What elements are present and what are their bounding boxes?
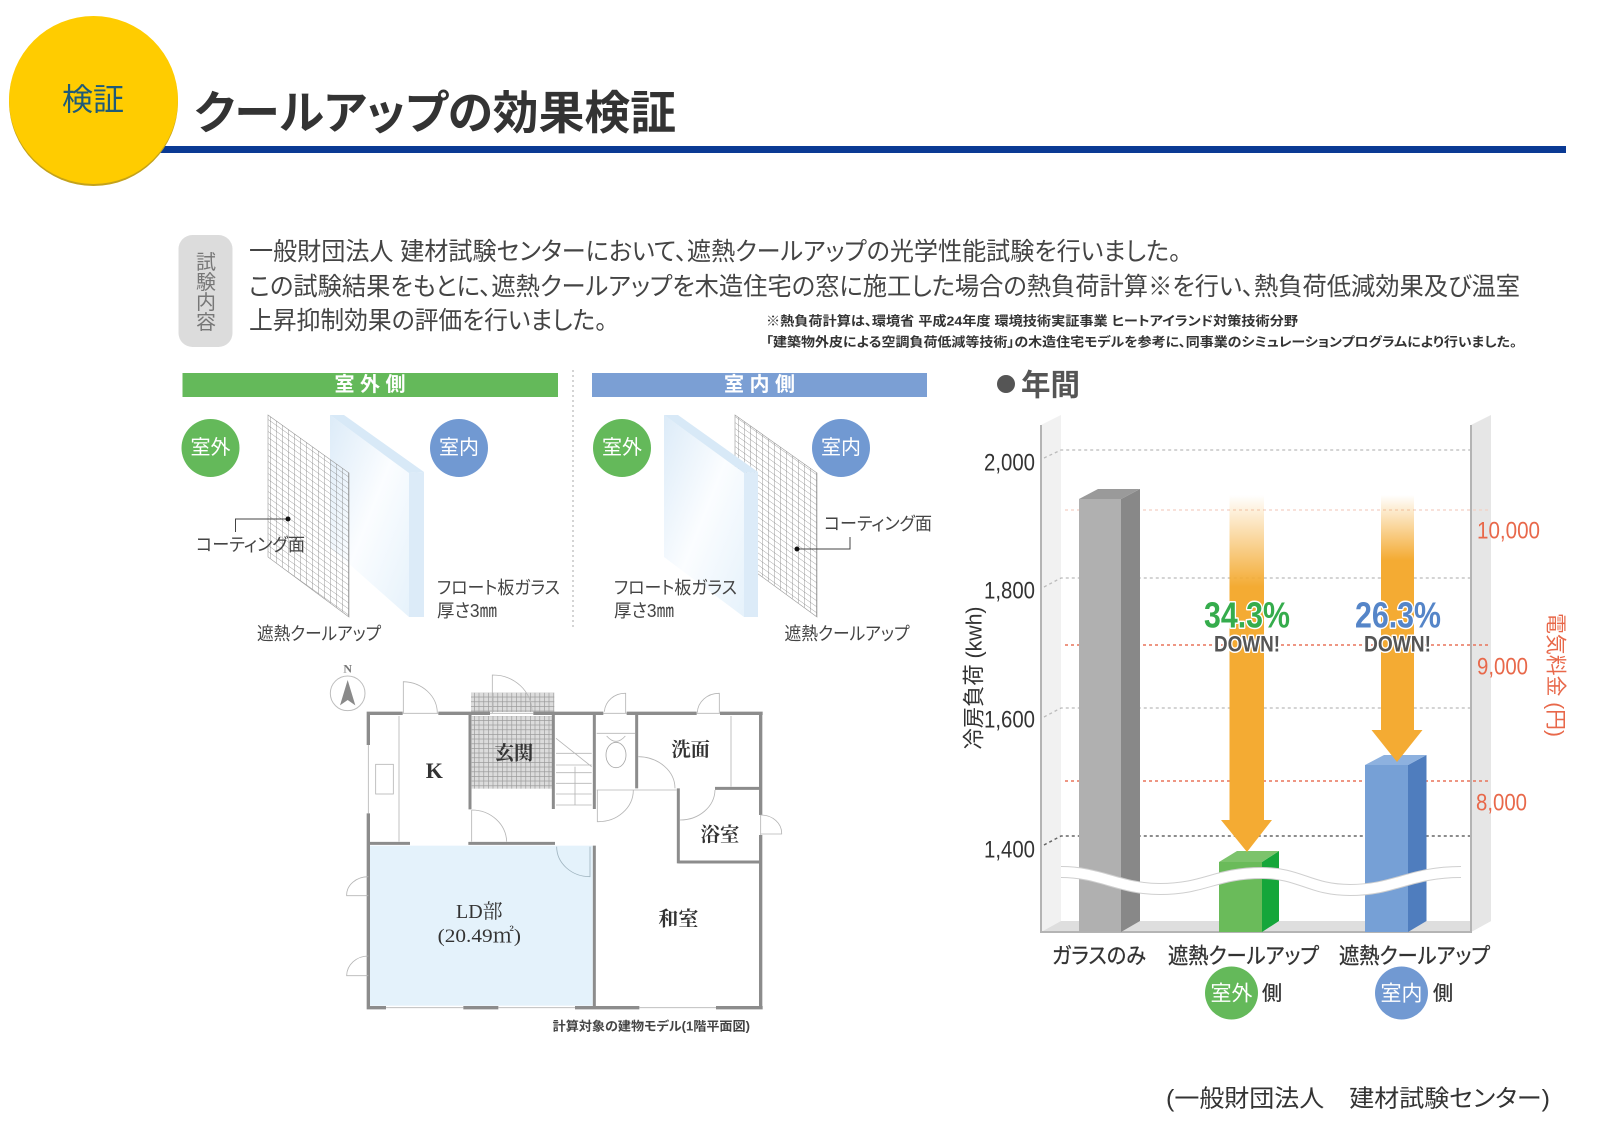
label pill: 試験内容 (178, 235, 232, 347)
glass label: フロート板ガラス (437, 578, 560, 598)
right axis labels: 10,000 (1477, 518, 1540, 544)
badge: 室外 (182, 419, 240, 477)
label pill: 試験内容: 容 (196, 311, 216, 334)
header bar: 室外側: 室 外 側 (334, 373, 406, 396)
callout: 26.3% down (1355, 594, 1441, 656)
label pill: 試験内容: 試 (196, 251, 216, 274)
description text: この試験結果をもとに、遮熱クールアップを木造住宅の窓に施工した場合の熱負荷計算※を行い、熱負荷低減効果及び温室 (249, 273, 1520, 301)
glass pane (330, 415, 424, 617)
plan caption: 計算対象の建物モデル(1階平面図) (553, 1019, 750, 1034)
badge: 検証 (9, 16, 178, 186)
description text (249, 238, 1520, 335)
footnote: 「建築物外皮による空調負荷低減等技術」の木造住宅モデルを参考に、同事業のシミュレーションプログラムにより行いました。 (766, 334, 1517, 350)
label pill: 試験内容: 内 (196, 291, 216, 314)
room labels: K (426, 758, 443, 783)
footnote: ※熱負荷計算は、環境省 平成24年度 環境技術実証事業 ヒートアイランド対策技術分野 (766, 314, 1298, 328)
bar: glass only (1079, 489, 1140, 932)
callout: 34.3% down (1204, 594, 1290, 656)
chart frame (1041, 415, 1491, 932)
header bar: 室内側: 室 内 側 (724, 373, 795, 396)
room fill: LD (370, 846, 593, 1006)
room labels: 洗面 (671, 739, 710, 761)
description text: 一般財団法人 建材試験センターにおいて、遮熱クールアップの光学性能試験を行いました。 (249, 238, 1181, 266)
left axis labels: 1,800 (984, 578, 1035, 604)
header bar: 室内側 (592, 373, 927, 397)
right axis labels: 9,000 (1477, 654, 1528, 680)
footnote (766, 314, 1517, 350)
badge: 室外: 室外 (190, 436, 230, 459)
film label: 遮熱クールアップ (257, 624, 381, 644)
coating label and leader (794, 514, 932, 552)
room labels (426, 739, 739, 947)
category label: outdoor side: 側 (1262, 982, 1282, 1005)
panel: indoor-side application (592, 373, 932, 644)
compass: N (343, 661, 352, 675)
left axis labels: 1,600 (984, 706, 1035, 734)
glass label (614, 578, 737, 621)
category label: outdoor side: 遮熱クールアップ (1168, 944, 1319, 968)
category label: indoor side: 遮熱クールアップ (1339, 944, 1490, 968)
callout: 26.3% down: DOWN! (1364, 632, 1431, 656)
badge: 室外: 室外 (602, 436, 642, 459)
floor plan (330, 661, 782, 1034)
callout: 34.3% down: DOWN! (1214, 632, 1280, 656)
header bar: 室外側 (182, 373, 558, 397)
glass label: 厚さ3㎜ (437, 601, 497, 621)
bar: indoor side (1365, 755, 1426, 932)
category label: indoor side: 室内 (1380, 982, 1422, 1006)
badge: 室外 (593, 419, 651, 477)
compass (330, 661, 365, 711)
category label: indoor side: 側 (1433, 982, 1453, 1005)
badge: 検証: 検証 (62, 82, 124, 118)
label pill: 試験内容: 験 (196, 271, 216, 294)
walls (367, 713, 763, 1009)
left axis labels: 2,000 (984, 450, 1035, 476)
right axis labels (1476, 518, 1540, 816)
panel: outdoor-side application (182, 373, 560, 644)
glass label: フロート板ガラス (614, 578, 737, 598)
room labels: 玄関 (495, 742, 533, 764)
callout: 26.3% down: 26.3% (1355, 594, 1441, 636)
left axis labels (984, 450, 1035, 864)
arrow: indoor reduction (1372, 495, 1422, 762)
badge: 室内: 室内 (821, 436, 861, 459)
chart: annual cooling load (962, 370, 1566, 1020)
left axis labels: 1,400 (984, 836, 1035, 864)
callout: 34.3% down: 34.3% (1204, 594, 1290, 636)
category label: indoor side (1339, 944, 1490, 1020)
title: クールアップの効果検証 (194, 87, 676, 139)
entrance tile (471, 693, 554, 789)
glass label: 厚さ3㎜ (614, 601, 674, 621)
description text: 上昇抑制効果の評価を行いました。 (249, 307, 607, 335)
right axis labels: 8,000 (1476, 790, 1527, 816)
room labels: 浴室 (701, 823, 739, 846)
doors (347, 675, 782, 976)
header rule (160, 146, 1566, 153)
room labels: LD部 (456, 900, 503, 923)
film mesh (735, 415, 817, 617)
category label: glass only: ガラスのみ (1052, 944, 1146, 968)
room labels: (20.49㎡) (438, 925, 521, 947)
coating label and leader: コーティング面 (824, 514, 932, 534)
category label: outdoor side (1168, 944, 1319, 1020)
badge: 室内 (812, 419, 870, 477)
scale break wave (1061, 872, 1461, 890)
glass pane (664, 415, 758, 617)
badge: 室内 (430, 419, 488, 477)
right axis title: 電気料金 (円) (1544, 613, 1566, 737)
film label: 遮熱クールアップ (784, 624, 910, 644)
coating label and leader (196, 516, 305, 555)
glass label (437, 578, 560, 621)
film mesh (268, 415, 349, 617)
left axis title: 冷房負荷 (kwh) (962, 606, 986, 750)
panel: test description (178, 235, 1520, 350)
badge: 室内: 室内 (439, 436, 479, 459)
grid lines (1044, 450, 1491, 845)
chart heading: 年間 (1021, 370, 1080, 402)
source credit: (一般財団法人 建材試験センター) (1166, 1086, 1550, 1112)
coating label and leader: コーティング面 (196, 535, 305, 555)
room labels: 和室 (658, 906, 698, 930)
bar: outdoor side (1219, 851, 1279, 932)
category label: outdoor side: 室外 (1210, 982, 1252, 1006)
arrow: outdoor reduction (1221, 495, 1272, 852)
